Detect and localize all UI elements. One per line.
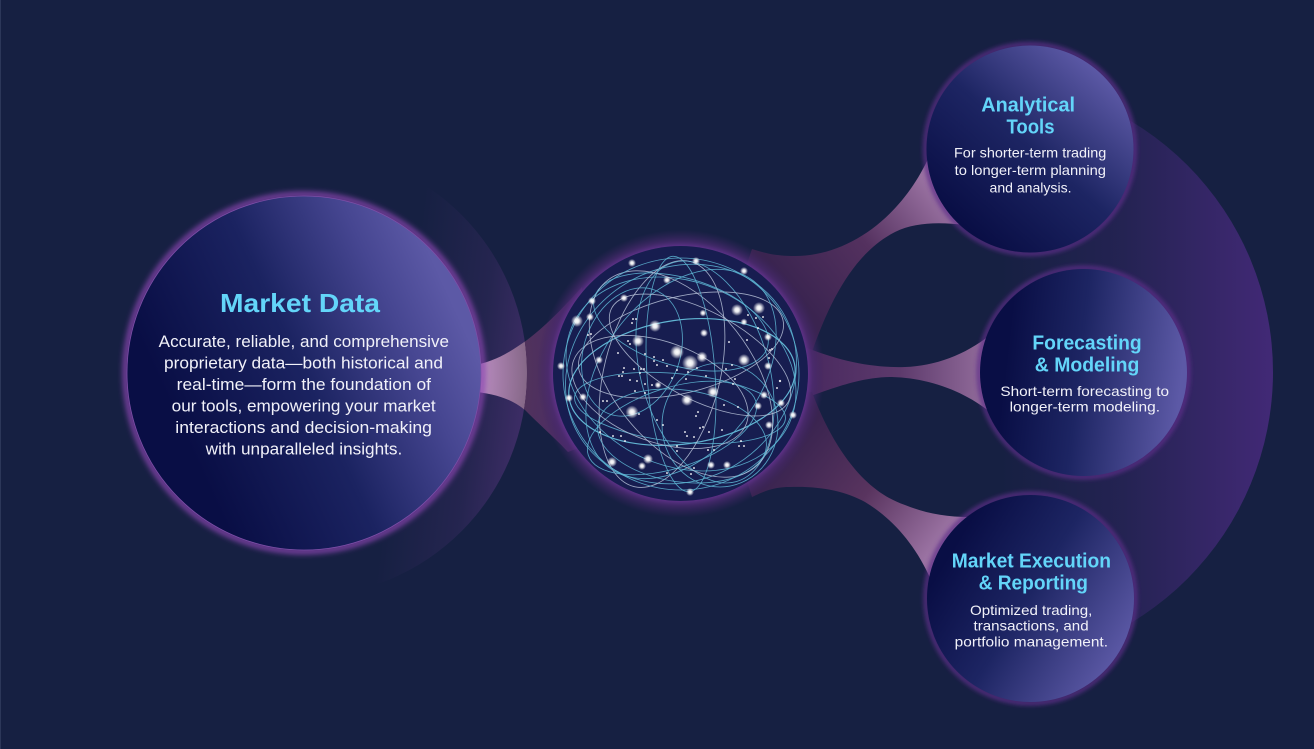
- heading: market execution and reporting: [952, 550, 1111, 594]
- body text: market data: Accurate, reliable, and comprehensive: [159, 333, 449, 351]
- body text: market data: interactions and decision-making: [175, 419, 432, 437]
- heading: analytical tools: Analytical: [981, 95, 1075, 117]
- body text: market execution and reporting: transactions, and: [974, 618, 1089, 634]
- body text: market data: our tools, empowering your market: [172, 398, 436, 416]
- panel: forecasting and modeling: [979, 268, 1188, 477]
- body text: forecasting and modeling: Short-term forecasting to: [1000, 383, 1169, 399]
- body text: market data: with unparalleled insights.: [205, 440, 402, 458]
- globe orbit lines: [524, 221, 838, 527]
- heading: forecasting and modeling: & Modeling: [1035, 354, 1139, 376]
- heading: market execution and reporting: & Reporting: [979, 572, 1088, 594]
- body text: forecasting and modeling: longer-term modeling.: [1010, 399, 1160, 415]
- body text: market execution and reporting: Optimized trading,: [970, 602, 1092, 618]
- body text: analytical tools: For shorter-term trading: [954, 144, 1106, 160]
- heading: market data: Market Data: [220, 288, 381, 318]
- heading: forecasting and modeling: Forecasting: [1032, 332, 1142, 354]
- globe: [524, 221, 838, 527]
- left backdrop crescent: [79, 149, 527, 597]
- panel: market execution and reporting: [926, 494, 1135, 703]
- heading: analytical tools: Tools: [1006, 117, 1054, 139]
- right backdrop arc: [688, 80, 1273, 664]
- body text: market data: proprietary data—both historical and: [164, 354, 443, 372]
- heading: forecasting and modeling: [1032, 332, 1142, 376]
- body text: analytical tools: and analysis.: [990, 180, 1072, 196]
- body text: analytical tools: to longer-term planning: [955, 162, 1106, 178]
- globe nodes: [557, 257, 797, 496]
- body text: market execution and reporting: portfolio management.: [955, 634, 1108, 650]
- connector: market data to globe: [470, 287, 600, 452]
- heading: market execution and reporting: Market Execution: [952, 550, 1111, 572]
- body text: market data: real-time—form the foundation of: [177, 376, 431, 394]
- connector: globe to forecasting: [800, 335, 990, 412]
- heading: analytical tools: [981, 95, 1075, 139]
- connector: globe to market execution: [745, 392, 970, 590]
- panel: market data: [126, 194, 482, 552]
- body text: analytical tools: [954, 144, 1106, 196]
- globe small stars: [587, 314, 781, 475]
- body text: market execution and reporting: [955, 602, 1108, 650]
- connector: globe to analytical tools: [745, 150, 965, 355]
- panel: analytical tools: [926, 44, 1134, 254]
- body text: market data: [159, 333, 449, 458]
- body text: forecasting and modeling: [1000, 383, 1169, 415]
